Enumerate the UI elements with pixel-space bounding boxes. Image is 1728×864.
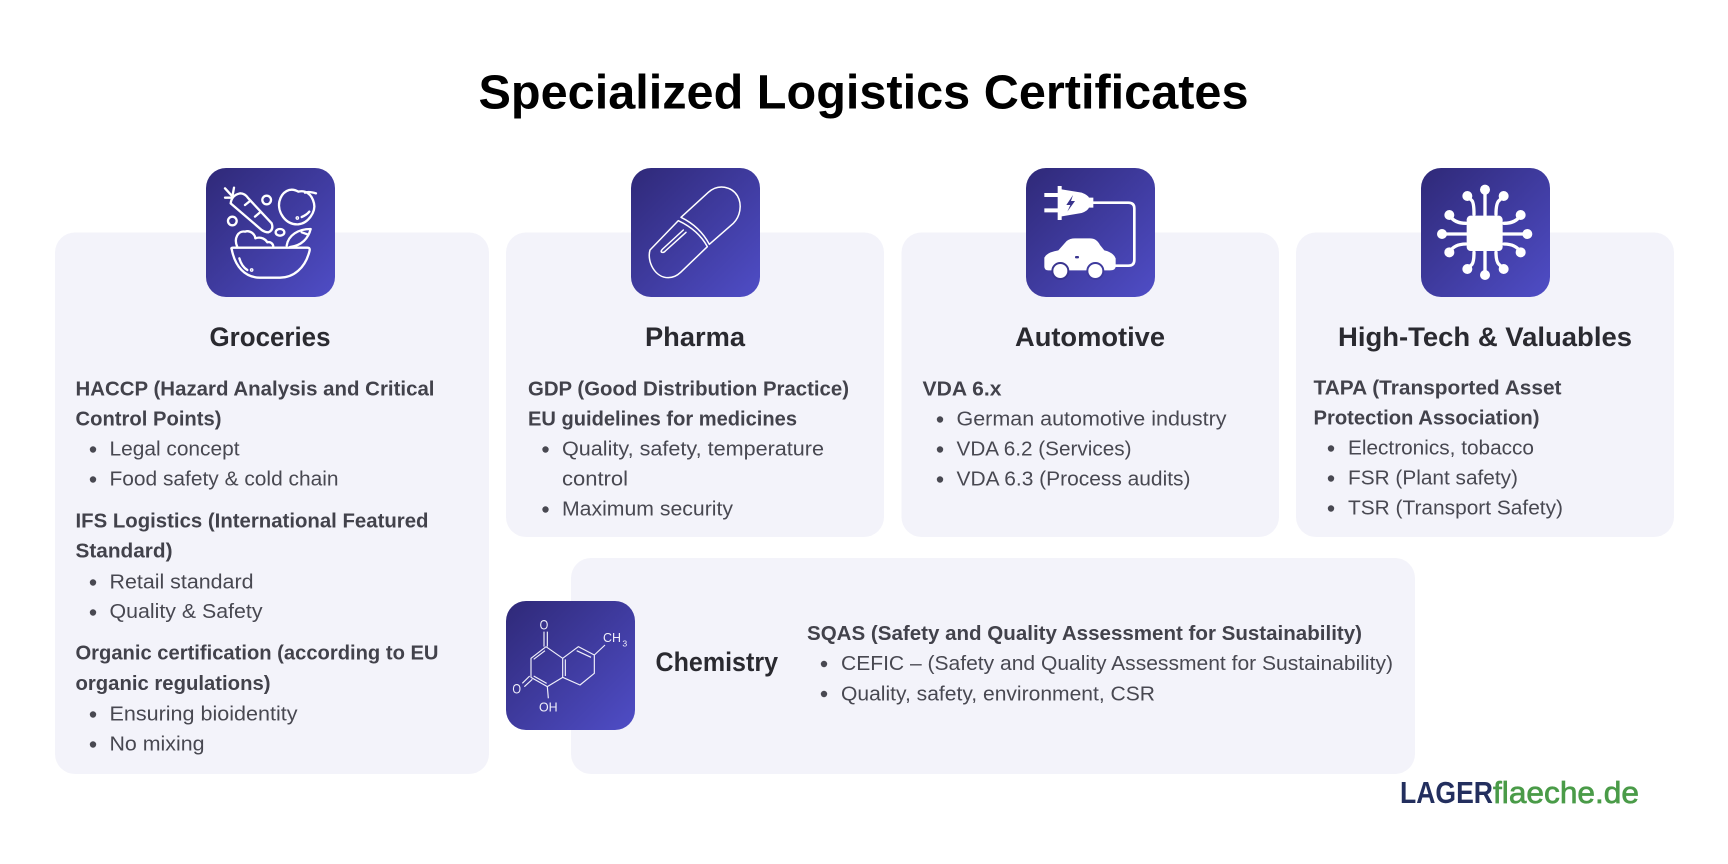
text block: GDP: Quality, safety, temperature (562, 438, 824, 460)
heading: pharma: Pharma (645, 322, 745, 352)
panel: groceries (55, 168, 489, 774)
text block: TAPA: Electronics, tobacco (1348, 438, 1534, 460)
text block: certificates (76, 378, 438, 756)
logo: flaeche.de (1493, 775, 1639, 810)
icon: electric car (1026, 168, 1155, 297)
logo: LAGER (1400, 775, 1493, 810)
card background (1296, 232, 1674, 537)
text block: SQAS: CEFIC – (Safety and Quality Assessment for Sustainability) (841, 653, 1393, 675)
text block: certificates: Standard) (76, 540, 172, 562)
text block: GDP: EU guidelines for medicines (528, 408, 797, 430)
title: Specialized Logistics Certificates (478, 66, 1248, 120)
text block: TAPA: Protection Association) (1314, 408, 1540, 430)
logo (1400, 775, 1639, 810)
icon: molecule: CH (603, 630, 621, 645)
text block: VDA: German automotive industry (956, 408, 1226, 430)
text block: certificates: Retail standard (110, 572, 254, 594)
heading: chemistry: Chemistry (656, 647, 778, 677)
text block: VDA: VDA 6.2 (Services) (956, 438, 1132, 460)
text block: certificates: IFS Logistics (International Featured (76, 510, 428, 532)
panel: high-tech (1296, 168, 1674, 537)
text block: certificates: Ensuring bioidentity (110, 704, 298, 726)
icon: molecule (506, 601, 635, 730)
icon: vegetable bowl (206, 168, 335, 297)
card background (902, 232, 1279, 537)
text block: SQAS (807, 623, 1393, 706)
text block: GDP (528, 378, 849, 520)
card background (571, 558, 1415, 774)
text block: GDP: control (562, 468, 628, 490)
heading: high-tech: High-Tech & Valuables (1338, 322, 1632, 352)
text block: certificates: Quality & Safety (110, 601, 262, 623)
text block: TAPA: TAPA (Transported Asset (1314, 378, 1562, 400)
icon: molecule: OH (539, 700, 558, 715)
text block: certificates: Food safety & cold chain (110, 468, 338, 490)
text block: SQAS: SQAS (Safety and Quality Assessment for Sustainability) (807, 623, 1362, 645)
text block: VDA (922, 378, 1226, 490)
text block: GDP: Maximum security (562, 498, 733, 520)
panel: chemistry (506, 558, 1415, 774)
icon: molecule: 3 (622, 639, 627, 649)
text block: GDP: GDP (Good Distribution Practice) (528, 378, 849, 400)
text block: certificates: Legal concept (110, 438, 240, 460)
card background (55, 232, 489, 774)
text block: VDA: VDA 6.x (922, 378, 1002, 400)
heading: groceries: Groceries (210, 322, 330, 352)
text block: certificates: No mixing (110, 734, 204, 756)
icon: microchip (1421, 168, 1550, 297)
text block: certificates: HACCP (Hazard Analysis and Critical (76, 378, 435, 400)
card background (506, 232, 884, 537)
panel: automotive (902, 168, 1279, 537)
text block: TAPA: FSR (Plant safety) (1348, 468, 1518, 490)
panel: pharma (506, 168, 884, 537)
text block: TAPA (1314, 378, 1563, 520)
text block: TAPA: TSR (Transport Safety) (1348, 498, 1563, 520)
heading: automotive: Automotive (1015, 322, 1165, 352)
text block: certificates: Organic certification (according to EU (76, 642, 438, 664)
icon: molecule: O (512, 680, 521, 696)
text block: VDA: VDA 6.3 (Process audits) (956, 468, 1190, 490)
text block: certificates: Control Points) (76, 408, 222, 430)
text block: SQAS: Quality, safety, environment, CSR (841, 684, 1155, 706)
icon: capsule (631, 168, 760, 297)
icon: molecule: O (540, 616, 548, 632)
text block: certificates: organic regulations) (76, 673, 270, 695)
